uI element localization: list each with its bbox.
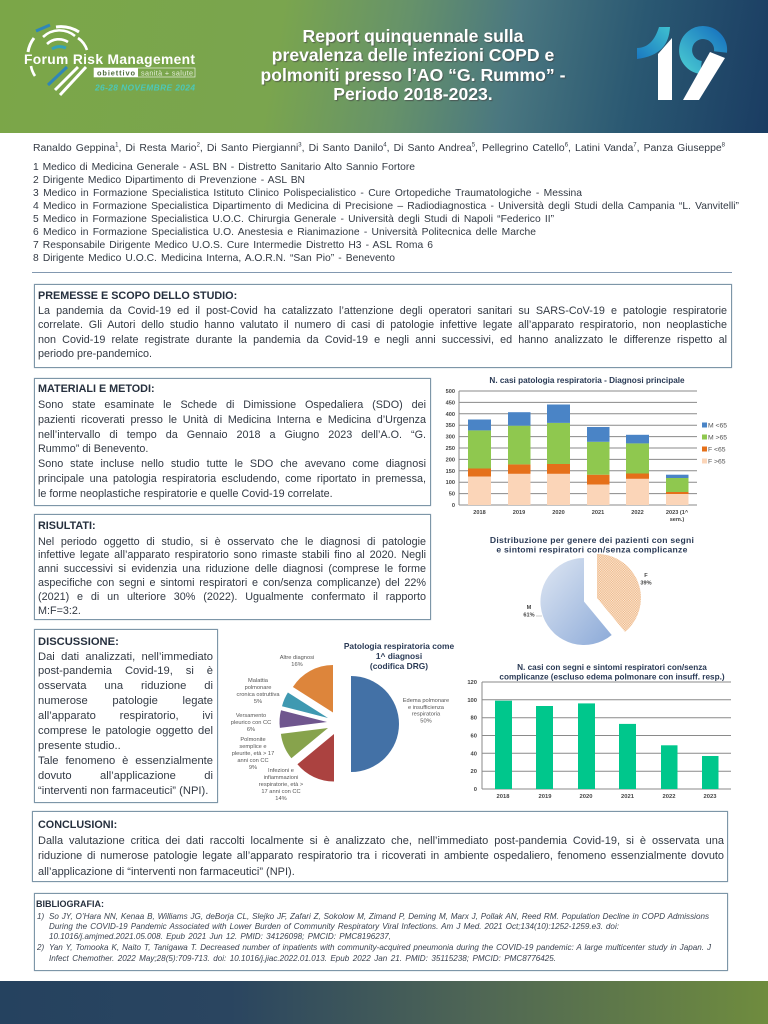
text: discussione: numerose patologie legate [38,695,213,707]
y axis labels: 0 [452,503,455,509]
chart title: Patologia respiratoria come [344,641,454,651]
chart: casi patologia respiratoria stacked bars [446,376,727,523]
text: premesse [38,305,727,360]
text: materiali [38,399,426,500]
label: F: 39% [640,580,652,586]
text: materiali: principale una patologia respiratoria escludendo, come riportato in premessa, [38,473,426,485]
slice: infezioni [297,734,334,782]
label: versamento: 6% [247,727,255,733]
label: malattia: 5% [254,699,262,705]
panel: conclusioni [32,811,728,882]
chart title: N. casi con segni e sintomi respiratori con/senza [517,663,707,672]
text: premesse: correlate. Gli Autori dello studio hanno valutato il numero di casi di patologie infettive legate all’apparato respiratorio, non neoplastiche [38,319,727,331]
label: infezioni: respiratorie, età > [259,782,304,788]
title: polmoniti presso l’AO “G. Rummo” - [260,65,565,85]
text: conclusioni: all’applicazione di “interventi non farmaceutici” (NPI). [38,866,295,878]
label: polmonite: pleurite, età > 17 [232,751,274,757]
icon: pin arcs [28,25,87,95]
y axis labels: 500 [446,389,455,395]
x axis labels [497,794,717,800]
chart: patologia respiratoria DRG pie [231,641,454,802]
text: risultati: infettive legate all’apparato respiratorio sono rimaste stabili fino al 2020. Negli [38,549,426,561]
y axis labels: 100 [467,698,477,704]
text: conclusioni: riduzione di numerose patologie legate all’apparato respiratorio tra i ricoverati in ambiente ospedaliero, fenomeno essenzialmente dovuto [38,850,724,862]
text: discussione: all’apparato respiratorio, ivi [38,710,213,722]
x axis labels: sem.) [670,517,684,523]
label: polmonite: anni con CC [237,758,269,764]
y axis labels [446,389,455,509]
text: risultati: aspecifiche con segni e sintomi respiratori e con/senza complicanze) del 22% [38,577,426,589]
bars 2022 [626,435,649,505]
y axis labels: 120 [467,680,477,686]
footer band [0,981,768,1024]
panel: risultati [34,514,431,620]
logo: Forum Risk Management [24,25,195,95]
label: altre: 16% [291,662,303,668]
slice: malattia polmonare [282,692,328,718]
references [37,912,712,963]
bars [495,701,718,789]
bars 2020 [547,404,570,505]
affiliations: 5 Medico in Formazione Specialistica U.O.C. Chirurgia Generale - Università degli Studi di Napoli “Federico II” [33,214,554,225]
text: materiali: Sono state esaminate le Schede di Dimissione Ospedaliera (SDO) dei [38,399,426,411]
x axis labels: 2020 [580,794,592,800]
affiliations: 3 Medico in Formazione Specialistica Istituto Clinico Polispecialistico - Cure Ortopediche Traumatologiche - Messina [33,188,582,199]
text: premesse: La pandemia da Covid-19 ed il post-Covid ha catalizzato l’attenzione degli operatori sanitari su SARS-CoV-19 e patologie respiratorie [38,305,727,317]
text: risultati: (2021) e di un ulteriore 30% (2022). Ugualmente confermato il rapporto [38,591,426,603]
text: premesse: non Covid-19 relate registrate durante la pandemia da Covid-19 e negli anni successivi, ed hanno analizzato le differenze rispetto al [38,334,727,346]
title [260,26,566,104]
y axis labels: 300 [446,435,455,441]
text: discussione: “interventi non farmaceutici” (NPI). [38,785,208,797]
y axis labels [467,680,477,793]
label: versamento [231,713,271,733]
x axis labels: 2022 [631,510,644,516]
references: Yan Y, Tomooka K, Naito T, Tanigawa T. Decreased number of inpatients with community-acquired pneumonia during the COVID-19 pandemic: A large multicenter study in Japan. J [49,943,711,952]
text: discussione: dovuto all’applicazione di [38,770,213,782]
chart title: complicanze (escluso edema polmonare con insuff. resp.) [499,672,725,682]
slice: F [597,554,641,632]
text: materiali: pazienti ricoverati presso le Unità di Medicina Interna e Medicina d’Urgenza [38,414,426,426]
heading: conclusioni: CONCLUSIONI: [38,819,117,831]
y axis labels: 400 [446,412,455,418]
text: materiali: Sono state incluse nello studio tutte le SDO che avevano come diagnosi [38,458,426,470]
chart title [499,663,725,682]
label: malattia: cronica ostruttiva [236,692,280,698]
y axis labels: 50 [449,492,455,498]
text: discussione: post-pandemia Covid-19, si è [38,665,213,677]
text: discussione: comprese le patologie oggetto del [38,725,213,737]
x axis labels: 2018 [473,510,486,516]
logo tagline [94,68,195,77]
legend: M >65 [708,434,727,442]
text: materiali: nell’intervallo di tempo da Gennaio 2018 a Giugno 2023 dell’A.O. “G. [38,429,426,441]
y axis labels: 40 [471,751,477,757]
legend [702,422,727,466]
text: materiali: Rummo” di Benevento. [38,443,148,455]
text: materiali: le forme neoplastiche respiratorie e quelle Covid-19 correlate. [38,488,333,500]
panel: discussione [34,629,218,803]
label: altre [280,655,314,668]
label: polmonite: 9% [249,765,257,771]
x axis labels: 2022 [663,794,675,800]
text: discussione: presente studio.. [38,740,121,752]
label: M: M [527,605,532,611]
text: risultati: anni successivi si evidenzia una riduzione delle diagnosi (comprese le forme [38,563,426,575]
text: conclusioni [38,835,724,878]
chart title: 1^ diagnosi [376,651,422,661]
label: versamento: Versamento [236,713,266,719]
heading: premesse: PREMESSE E SCOPO DELLO STUDIO: [38,290,237,302]
authors: Ranaldo Geppina1, Di Resta Mario2, Di Santo Piergianni3, Di Santo Danilo4, Di Santo Andrea5, Pellegrino Catello6, Latini Vanda7, Panza Giuseppe8 [33,143,725,154]
logo tagline: sanità + salute [141,68,193,77]
text: discussione: osservata una riduzione di [38,680,213,692]
label: M: 61% [523,612,535,618]
y axis labels: 250 [446,446,455,452]
label: infezioni: 17 anni con CC [261,789,301,795]
references: Infect Chemother. 2022 May;28(5):709-713. doi: 10.1016/j.jiac.2022.01.013. Epub 2022 Jan 21. PMID: 35115238; PMCID: PMC8776425. [49,954,556,963]
text: discussione: Dai dati analizzati, nell’immediato [38,651,213,663]
slice: polmonite [281,728,328,758]
y axis labels: 20 [471,769,477,775]
label: malattia [236,678,280,705]
label: polmonite: Polmonite [240,737,266,743]
slice: M [540,558,612,645]
chart: distribuzione per genere pie: e sintomi respiratori con/senza complicanze [496,544,688,554]
logo name: Forum Risk Management [24,52,195,67]
label: infezioni: 14% [275,796,287,802]
slice: versamento [280,710,327,728]
panel: materiali e metodi [34,378,431,506]
references: 10.1016/j.amjmed.2021.05.008. Epub 2021 Jun 12. PMID: 34126098; PMCID: PMC8196237, [49,932,391,941]
text: risultati: Nel periodo oggetto di studio, si è osservato che le diagnosi di patologie [38,536,426,548]
y axis labels: 150 [446,469,455,475]
y axis labels: 450 [446,400,455,406]
label: altre: Altre diagnosi [280,655,314,661]
text: risultati: M:F=3:2. [38,605,81,617]
label: malattia: polmonare [245,685,271,691]
x axis labels: 2023 (1^ [666,510,689,516]
logo date: 26-28 NOVEMBRE 2024 [94,82,195,92]
x axis labels: 2021 [592,510,604,516]
label: infezioni [259,768,304,802]
label: infezioni: Infezioni e [268,768,294,774]
y axis labels: 350 [446,423,455,429]
text: discussione [38,651,213,797]
panel: premesse [34,284,732,368]
text: premesse: periodo pre-pandemico. [38,348,152,360]
logo: 19 [637,27,725,100]
references: 2) [37,943,44,952]
slice: edema [351,676,399,772]
label: edema: e insufficienza [408,705,445,711]
chart title: Distribuzione per genere dei pazienti con segni [490,535,694,545]
y axis labels: 80 [471,716,477,722]
references: During the COVID-19 Pandemic Associated with Lower Burden of Community Respiratory Viral Infections. Am J Med. 2021 Oct;134(10):1252-1259.e3. doi: [49,922,619,931]
x axis labels: 2019 [539,794,552,800]
legend: M <65 [708,422,727,430]
title: Report quinquennale sulla [303,26,523,46]
text: risultati [38,536,426,617]
legend: F >65 [708,458,726,466]
panel: bibliografia [34,893,728,971]
chart title: (codifica DRG) [370,661,428,671]
affiliations: 8 Dirigente Medico U.O.C. Medicina Interna, A.O.R.N. “San Pio” - Benevento [33,253,395,264]
references: 1) [37,912,44,921]
chart title: N. casi patologia respiratoria - Diagnosi principale [489,376,685,385]
chart: casi con segni e sintomi bars [467,663,731,800]
text: discussione: Tale fenomeno è essenzialmente [38,755,213,767]
bars 2021 [587,427,610,505]
references: So JY, O’Hara NN, Kenaa B, Williams JG, deBorja CL, Slejko JF, Zafari Z, Sokolow M, Zimand P, Deming M, Marx J, Pollak AN, Reed RM. Population Decline in COPD Admissions [49,912,709,921]
x axis labels: 2023 [704,794,717,800]
affiliations: 6 Medico in Formazione Specialistica U.O. Anestesia e Rianimazione - Università Politecnica delle Marche [33,227,536,238]
label: edema [403,698,449,724]
header banner [0,0,768,133]
chart title [344,641,454,671]
label: polmonite [232,737,274,771]
y axis labels: 200 [446,457,455,463]
label: F: F [644,573,648,579]
affiliations [33,162,739,264]
affiliations: 2 Dirigente Medico Dipartimento di Prevenzione - ASL BN [33,175,305,186]
bars 2023 [666,475,688,505]
y axis labels: 100 [446,480,455,486]
title: Periodo 2018-2023. [333,84,493,104]
heading: bibliografia: BIBLIOGRAFIA: [36,899,104,909]
affiliations: 1 Medico di Medicina Generale - ASL BN - Distretto Sanitario Alto Sannio Fortore [33,162,415,173]
label: M [523,605,542,618]
label: versamento: pleurico con CC [231,720,271,726]
x axis labels [473,510,689,523]
x axis labels: 2021 [621,794,635,800]
logo tagline: obiettivo [97,68,135,77]
slice: altre [293,665,333,712]
label: malattia: Malattia [248,678,269,684]
title: prevalenza delle infezioni COPD e [272,45,554,65]
text: conclusioni: Dalla valutazione critica dei dati raccolti localmente si è analizzato che, nell’immediato post-pandemia Covid-19, si è osservata una [38,835,724,847]
label: F [640,573,652,586]
heading: discussione: DISCUSSIONE: [38,636,119,648]
label: edema: respiratoria [412,712,441,718]
label: polmonite: semplice e [239,744,267,750]
legend: F <65 [708,446,726,454]
x axis labels: 2019 [513,510,525,516]
y axis labels: 60 [471,734,477,740]
label: infezioni: infiammazioni [264,775,298,781]
affiliations: 4 Medico in Formazione Specialistica Dipartimento di Medicina di Precisione – Radiodiagnostica - Università degli Studi della Campania “L. Vanvitelli” [33,201,739,212]
bars 2018 [468,420,491,505]
x axis labels: 2018 [497,794,510,800]
chart: distribuzione per genere pie [490,535,694,645]
heading: risultati: RISULTATI: [38,520,96,532]
label: edema: Edema polmonare [403,698,449,704]
affiliations: 7 Responsabile Dirigente Medico U.O.S. Cure Intermedie Distretto H3 - ASL Roma 6 [33,240,433,251]
y axis labels: 0 [474,787,477,793]
heading: materiali: MATERIALI E METODI: [38,383,155,395]
bars 2019 [508,412,530,505]
label: edema: 50% [420,718,432,724]
x axis labels: 2020 [552,510,565,516]
